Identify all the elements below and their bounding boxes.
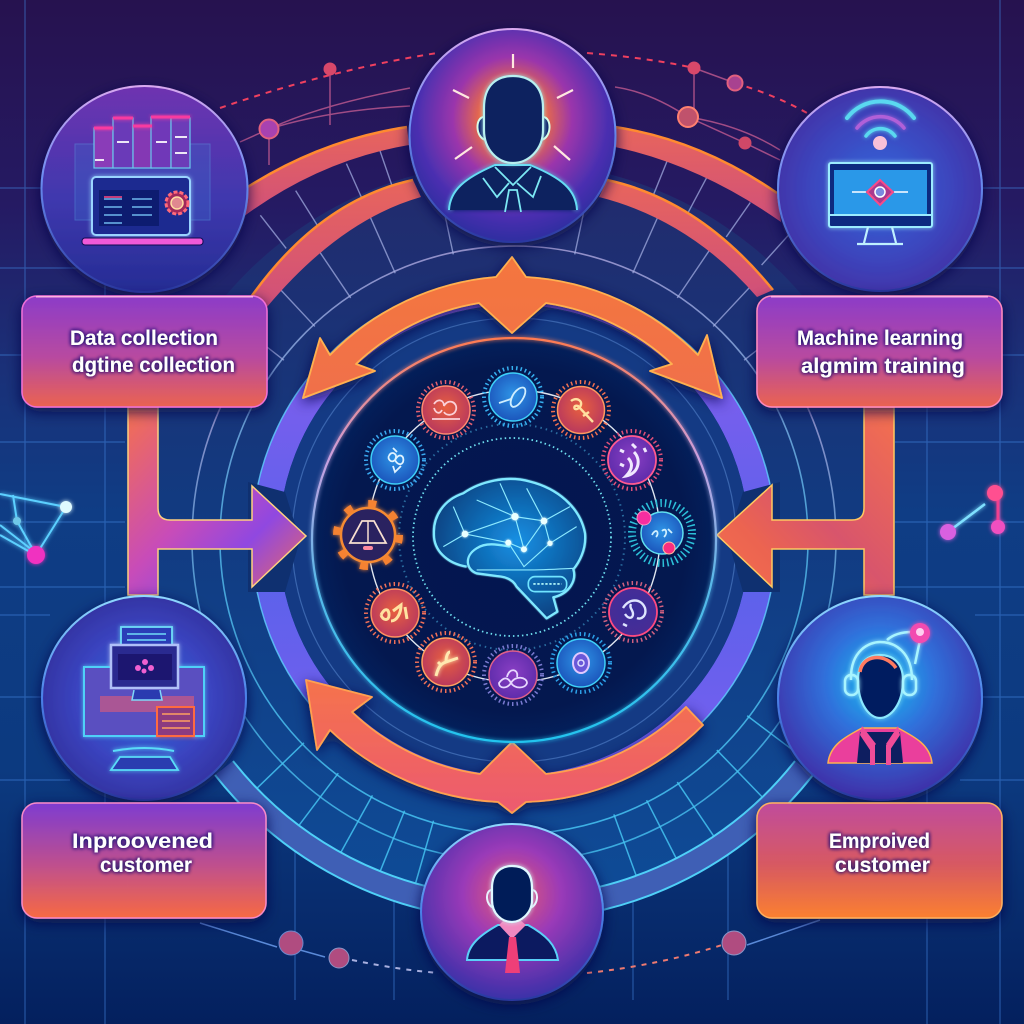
- node graph: left: [0, 494, 72, 564]
- label: machine learning: Machine learning: [797, 327, 963, 350]
- label: improved customer left: Inproovened: [72, 830, 213, 853]
- satellite 7: magenta: [484, 646, 542, 704]
- icon: person with rays: [449, 54, 577, 212]
- ring edges: [252, 278, 776, 802]
- satellite 6: blue ring: [552, 634, 610, 692]
- satellite 3: purple: [603, 431, 661, 489]
- label: improved customer left: [22, 803, 266, 918]
- ring: lavender band: [266, 292, 762, 788]
- circle: customer workstation: [42, 596, 246, 800]
- network lines: bottom: [200, 920, 820, 973]
- outer lower ring: [215, 761, 813, 920]
- icon: person with tie: [467, 866, 558, 973]
- network lines: top: [220, 53, 807, 165]
- bottom double-headed arrow: [306, 680, 703, 813]
- satellite 11: blue: [366, 431, 424, 489]
- satellite 12: red: [418, 382, 474, 438]
- satellite 1: blue: [484, 368, 542, 426]
- left T-shaped connector arrow: [128, 407, 306, 595]
- right T-shaped connector arrow: [717, 407, 894, 595]
- circle: customer: [421, 824, 603, 1000]
- icon: headset agent: [828, 623, 932, 765]
- icon: bar charts and laptop: [75, 117, 210, 245]
- satellite 9: orange: [366, 584, 424, 642]
- upper orange arcs: [243, 127, 781, 307]
- label: improved customer right: Emproived: [829, 830, 930, 853]
- label: improved customer left: customer: [100, 854, 192, 877]
- satellite 10: warning gear: [336, 504, 400, 566]
- label: machine learning: [757, 296, 1002, 407]
- satellite 2: red: [553, 382, 609, 438]
- circle: machine learning: [778, 87, 982, 291]
- circle: data collection: [42, 86, 248, 292]
- label: improved customer right: [757, 803, 1002, 918]
- central hub: [312, 338, 716, 742]
- circle: central leader: [410, 29, 616, 242]
- label: machine learning: algmim training: [801, 355, 965, 378]
- label: improved customer right: customer: [835, 854, 930, 877]
- label: data collection: dgtine collection: [72, 354, 235, 377]
- label: data collection: [22, 296, 267, 407]
- circle: support agent: [778, 596, 982, 800]
- radial grid disc: [136, 150, 892, 918]
- satellite 4: teal with pink nodes: [632, 503, 692, 563]
- icon: wifi and monitor: [829, 101, 932, 244]
- satellite 8: orange: [417, 633, 475, 691]
- dark notches behind side arrows: [248, 482, 780, 592]
- label: data collection: Data collection: [70, 327, 218, 350]
- node graph: right: [940, 485, 1005, 540]
- dotted rings: [368, 390, 660, 682]
- brain: [434, 479, 585, 618]
- satellite 5: violet: [604, 583, 662, 641]
- icon: computers: [84, 627, 204, 770]
- top double-headed arrow: [303, 257, 722, 398]
